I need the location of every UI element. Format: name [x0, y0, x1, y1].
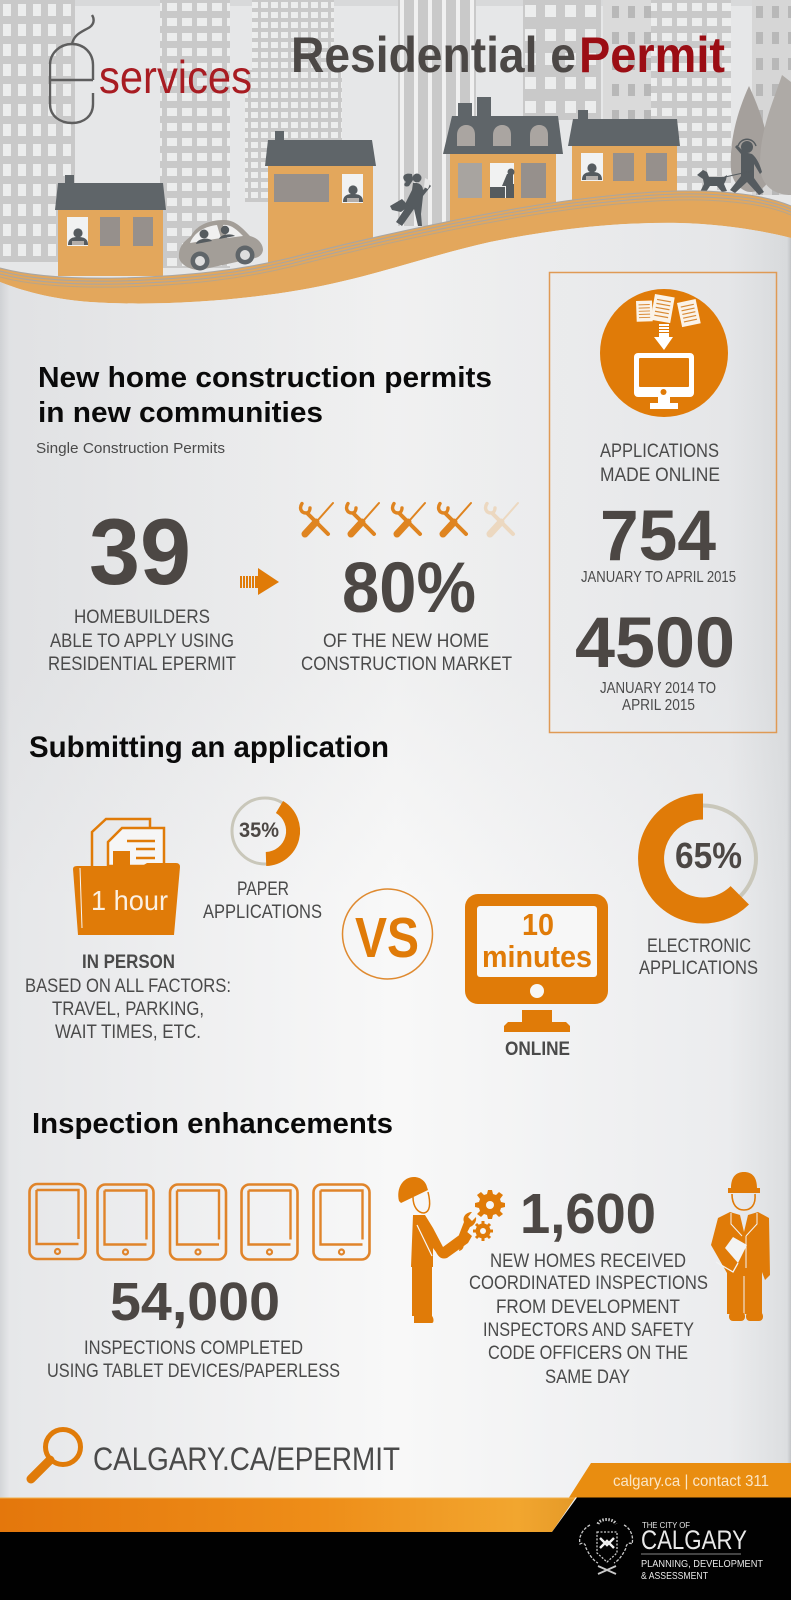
- city name and department: & ASSESSMENT: [641, 1571, 708, 1582]
- icon: monitor 10 minutes: [465, 894, 608, 1032]
- stat: 39 homebuilders: 39: [89, 499, 191, 604]
- footer contact tab: [569, 1463, 791, 1498]
- label: in person: IN PERSON: [82, 952, 175, 973]
- label: applications made online: [600, 441, 720, 486]
- stat: 80 percent of market: OF THE NEW HOME: [323, 631, 489, 652]
- icon: documents into monitor: [600, 289, 728, 417]
- icon: man walking dog: [697, 139, 764, 195]
- heading: new home construction permits: New home construction permits: [38, 362, 492, 394]
- stat: 4500: 4500: [575, 604, 735, 683]
- footer black base: [0, 1498, 791, 1600]
- link: calgary.ca/epermit: CALGARY.CA/EPERMIT: [93, 1441, 400, 1477]
- caption: january 2014 to april 2015: APRIL 2015: [622, 697, 695, 714]
- label: in person: [25, 952, 231, 1043]
- icon: house 1: [55, 175, 166, 276]
- heading: submitting an application: Submitting an application: [29, 731, 389, 764]
- header scene: trees: [731, 75, 791, 195]
- stat: 1,600 coordinated inspections: NEW HOMES RECEIVED: [490, 1251, 686, 1272]
- city name and department: THE CITY OF: [642, 1520, 690, 1530]
- logo text: services: services: [99, 51, 252, 103]
- title: Residential e: [291, 27, 576, 83]
- label: in person: WAIT TIMES, ETC.: [55, 1022, 201, 1043]
- label: paper applications: [203, 879, 322, 923]
- stat: 54,000 inspections: [47, 1272, 340, 1382]
- footer: [0, 1463, 791, 1600]
- stat: 39 homebuilders: [48, 499, 236, 675]
- stat: 39 homebuilders: ABLE TO APPLY USING: [50, 631, 234, 652]
- label: in person: BASED ON ALL FACTORS:: [25, 976, 231, 997]
- icon: car: [179, 220, 263, 270]
- city name and department: CALGARY: [641, 1525, 747, 1555]
- monitor label: 10: [522, 907, 554, 942]
- footer band: [0, 1498, 575, 1532]
- stat: 80 percent of market: CONSTRUCTION MARKET: [301, 654, 512, 675]
- icon: house 3: [443, 97, 563, 222]
- icon: house 4: [568, 110, 680, 206]
- panel: applications made online: [550, 272, 776, 732]
- stat: 1,600 coordinated inspections: INSPECTORS AND SAFETY: [483, 1320, 694, 1341]
- icon: inspector with clipboard: [711, 1172, 770, 1321]
- stat: 80 percent of market: [301, 549, 512, 675]
- logo: eServices mouse: [50, 15, 94, 123]
- donut: 65 percent electronic applications: 65%: [675, 835, 742, 876]
- icon: worker with gears: [398, 1177, 505, 1323]
- stat: 1,600 coordinated inspections: CODE OFFICERS ON THE: [488, 1343, 688, 1364]
- stat: 54,000 inspections: 54,000: [110, 1272, 280, 1332]
- donut: 65 percent electronic applications: [650, 806, 756, 912]
- label: electronic applications: APPLICATIONS: [639, 958, 758, 979]
- stat: 1,600 coordinated inspections: 1,600: [520, 1182, 656, 1246]
- label: paper applications: APPLICATIONS: [203, 902, 322, 923]
- label: applications made online: APPLICATIONS: [600, 441, 719, 462]
- stat: 754: 754: [600, 497, 716, 576]
- stat: 39 homebuilders: RESIDENTIAL EPERMIT: [48, 654, 236, 675]
- heading: new home construction permits: [38, 362, 492, 429]
- label: paper applications: PAPER: [237, 879, 289, 900]
- arrow: [240, 568, 279, 595]
- icon: house 2: [265, 131, 376, 264]
- stat: 1,600 coordinated inspections: FROM DEVELOPMENT: [496, 1297, 680, 1318]
- wavy road band: [0, 191, 791, 304]
- heading: inspection enhancements: Inspection enhancements: [32, 1108, 393, 1140]
- subheading: single construction permits: Single Construction Permits: [36, 441, 225, 457]
- stat: 54,000 inspections: INSPECTIONS COMPLETED: [84, 1338, 303, 1359]
- label: electronic applications: ELECTRONIC: [647, 936, 751, 957]
- monitor label: minutes: [482, 939, 592, 974]
- icon: woman walking: [390, 174, 431, 226]
- icon: folder 1 hour: [73, 819, 180, 935]
- stat: 1,600 coordinated inspections: [469, 1182, 708, 1388]
- folder label: 1 hour: [91, 885, 168, 916]
- badge: VS: VS: [355, 906, 419, 970]
- badge: VS: [342, 889, 432, 979]
- header scene: city skyline: [0, 0, 791, 290]
- city crest: [580, 1520, 633, 1574]
- body background below band: [0, 223, 791, 330]
- stat: 54,000 inspections: USING TABLET DEVICES/PAPERLESS: [47, 1361, 340, 1382]
- city name and department: [641, 1520, 763, 1582]
- caption: january to april 2015: JANUARY TO APRIL 2015: [581, 569, 736, 586]
- stat: 1,600 coordinated inspections: SAME DAY: [545, 1367, 630, 1388]
- title: Permit: [579, 27, 725, 83]
- label: electronic applications: [639, 936, 758, 979]
- stat: 1,600 coordinated inspections: COORDINATED INSPECTIONS: [469, 1273, 708, 1294]
- stat: 80 percent of market: 80%: [342, 549, 476, 628]
- icons: five tablets: [30, 1184, 370, 1260]
- icons: five crossed tools, four of five highlighted: [301, 503, 518, 534]
- city name and department: PLANNING, DEVELOPMENT: [641, 1559, 763, 1570]
- label: applications made online: MADE ONLINE: [600, 465, 720, 486]
- label: online: ONLINE: [505, 1039, 570, 1060]
- heading: new home construction permits: in new communities: [38, 397, 323, 429]
- stat: 39 homebuilders: HOMEBUILDERS: [74, 607, 210, 628]
- caption: january 2014 to april 2015: JANUARY 2014 TO: [600, 680, 716, 697]
- footer contact text: calgary.ca | contact 311: [613, 1473, 769, 1490]
- label: in person: TRAVEL, PARKING,: [52, 999, 204, 1020]
- donut: 35 percent paper applications: 35%: [239, 819, 279, 842]
- caption: january 2014 to april 2015: [600, 680, 716, 714]
- icon: magnifying glass: [31, 1430, 80, 1479]
- monitor label: [482, 907, 592, 974]
- donut: 35 percent paper applications: [232, 798, 298, 864]
